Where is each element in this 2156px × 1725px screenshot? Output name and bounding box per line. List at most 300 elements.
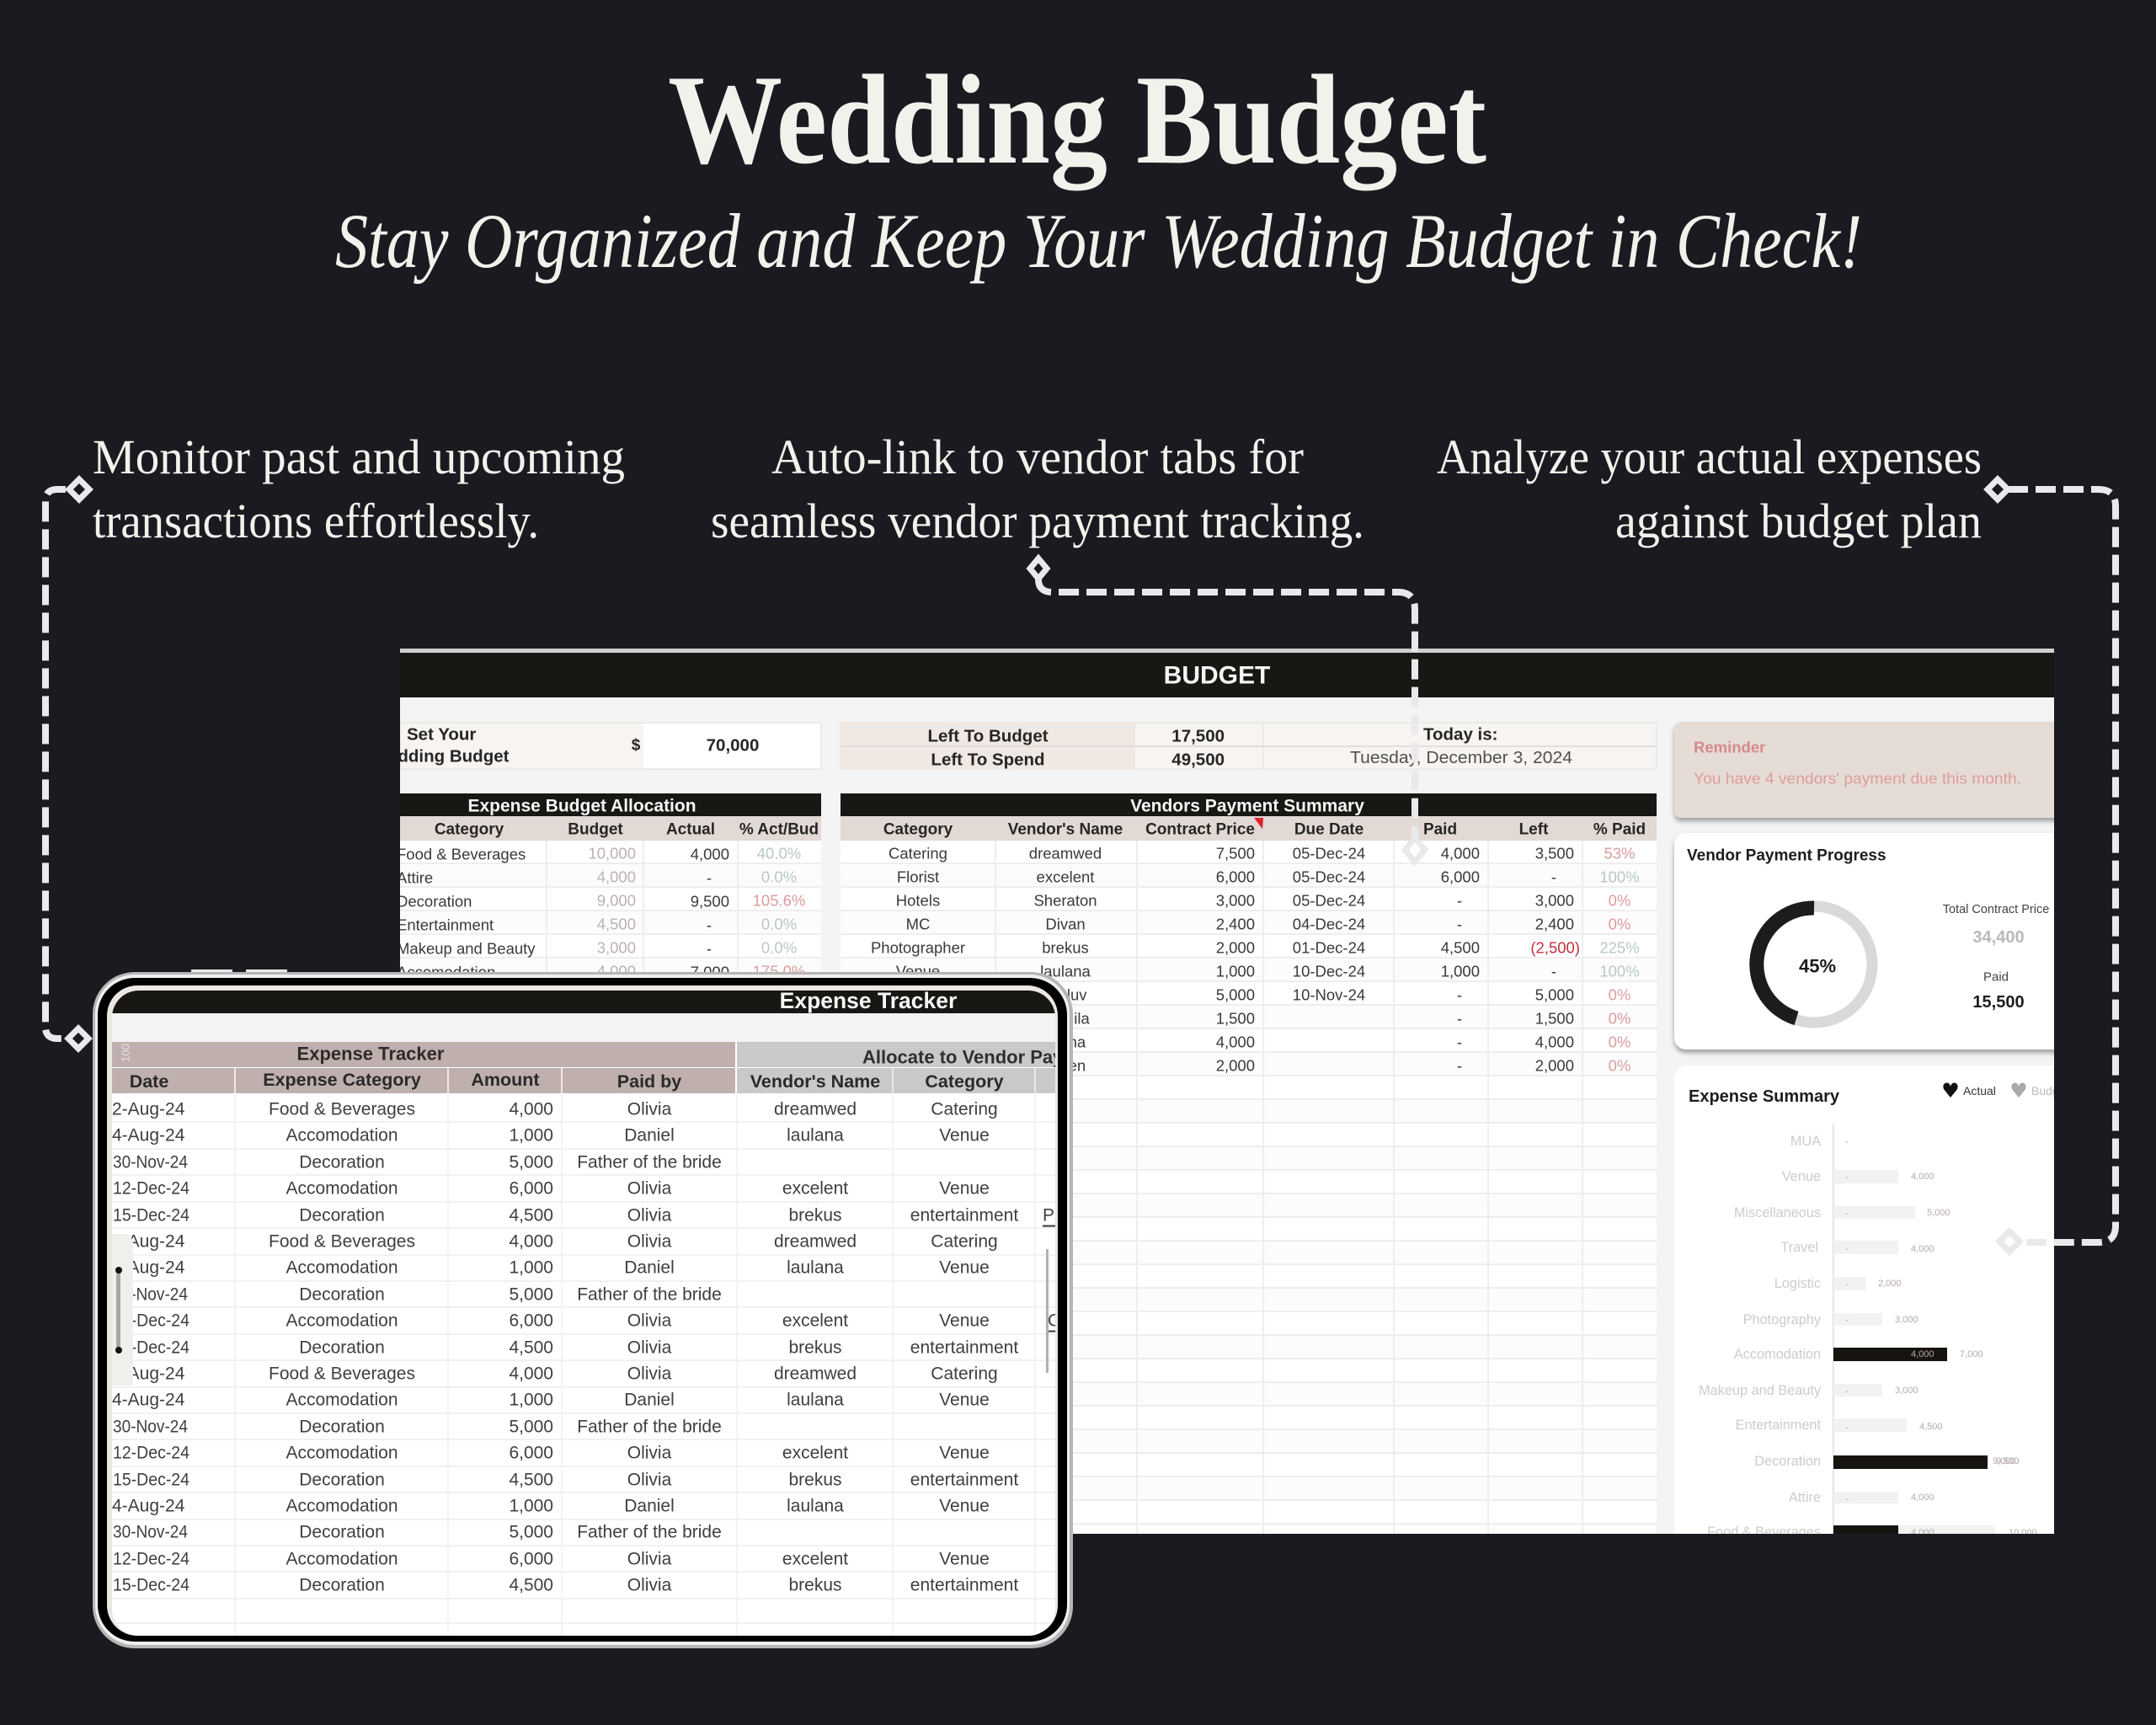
table: vendors payment summary: Category bbox=[883, 820, 953, 839]
tracker rows: 6,000 bbox=[509, 1179, 553, 1198]
caption: monitor transactions: transactions effortlessly. bbox=[93, 494, 539, 548]
table: expense budget allocation: Food & Beverages bbox=[397, 846, 526, 862]
tracker rows: 5,000 bbox=[509, 1285, 553, 1304]
tracker rows: 12-Dec-24 bbox=[113, 1179, 189, 1198]
tracker rows: excelent bbox=[782, 1311, 848, 1331]
tracker rows: Catering bbox=[931, 1231, 998, 1252]
payment figures: 15,500 bbox=[1972, 993, 2025, 1012]
column headers: Amount bbox=[471, 1070, 540, 1090]
tracker rows: Venue bbox=[939, 1125, 990, 1146]
table: vendors payment summary: Venue bbox=[896, 962, 940, 980]
table: vendors payment summary: - bbox=[1551, 868, 1556, 886]
table: vendors payment summary: Vendor's Name bbox=[1008, 820, 1123, 839]
table: vendors payment summary: 2,000 bbox=[1535, 1056, 1574, 1075]
bar chart: - bbox=[1845, 1423, 1849, 1433]
tracker rows: brekus bbox=[788, 1471, 842, 1489]
tracker rows: Decoration bbox=[299, 1152, 385, 1172]
panel: expense summary bbox=[1674, 1065, 2054, 1534]
legend: Budget bbox=[2031, 1084, 2068, 1097]
tracker rows: 4,500 bbox=[509, 1575, 553, 1595]
table: vendors payment summary: 6,000 bbox=[1441, 868, 1480, 886]
table: expense budget allocation: 9,500 bbox=[691, 893, 729, 910]
tracker rows: 4-Aug-24 bbox=[112, 1496, 185, 1516]
bar chart: 4,000 bbox=[1911, 1172, 1935, 1182]
tracker rows: 1,000 bbox=[509, 1258, 553, 1277]
bar chart: Photography bbox=[1743, 1312, 1822, 1327]
tracker rows: 1,000 bbox=[509, 1125, 553, 1146]
bar chart: Attire bbox=[1789, 1490, 1821, 1505]
tracker rows: Father of the bride bbox=[577, 1417, 722, 1437]
vendor allocation section header: Allocate to Vendor Payment bbox=[862, 1046, 1108, 1068]
expense tracker section header: 100 bbox=[120, 1044, 131, 1062]
tracker rows: 5,000 bbox=[509, 1523, 553, 1541]
bar chart: - bbox=[1845, 1209, 1849, 1219]
panel: reminder: You have 4 vendors' payment due this month. bbox=[1694, 770, 2021, 787]
tracker rows: Food & Beverages bbox=[269, 1231, 415, 1252]
column headers: Date bbox=[130, 1071, 168, 1092]
tracker rows: Decoration bbox=[299, 1206, 385, 1225]
bar chart: 9,000 bbox=[1993, 1456, 2016, 1466]
table: vendors payment summary: 0% bbox=[1609, 1033, 1630, 1051]
tracker rows: dreamwed bbox=[774, 1100, 857, 1119]
table: vendors payment summary: excelent bbox=[1037, 868, 1094, 886]
bar chart: - bbox=[1845, 1316, 1849, 1326]
table: vendors payment summary: 2,000 bbox=[1216, 938, 1255, 957]
tracker rows: Accomodation bbox=[286, 1550, 398, 1568]
bar chart: 5,000 bbox=[1927, 1208, 1951, 1218]
table: expense budget allocation: 7,000 bbox=[691, 964, 729, 980]
table: vendors payment summary: Weluv bbox=[1043, 985, 1087, 1004]
bar chart: 3,000 bbox=[1895, 1315, 1919, 1325]
column headers: Category bbox=[925, 1071, 1004, 1092]
tracker rows: Venue bbox=[939, 1311, 990, 1331]
payment figures: Paid bbox=[1983, 970, 2009, 984]
tracker rows: excelent bbox=[782, 1444, 848, 1462]
table: vendors payment summary: 10-Nov-24 bbox=[1293, 985, 1365, 1004]
today date box: Today is: bbox=[1423, 724, 1497, 745]
tracker rows: Olivia bbox=[627, 1444, 672, 1462]
table: expense budget allocation: 105.6% bbox=[753, 891, 805, 910]
table: vendors payment summary: dreamwed bbox=[1029, 844, 1102, 862]
tracker rows: 4,000 bbox=[509, 1231, 553, 1252]
table: vendors payment summary: 4,500 bbox=[1441, 938, 1480, 957]
tracker rows: Olivia bbox=[627, 1365, 672, 1383]
set your wedding budget box bbox=[372, 723, 821, 769]
table: vendors payment summary: 0% bbox=[1609, 1056, 1630, 1075]
table: vendors payment summary: Divan bbox=[1045, 915, 1086, 933]
table: vendors payment summary: Sheraton bbox=[1033, 891, 1097, 910]
table: expense budget allocation: Budget bbox=[568, 820, 623, 839]
panel: reminder: Reminder bbox=[1694, 738, 1765, 756]
table: vendors payment summary: 05-Dec-24 bbox=[1293, 868, 1365, 886]
tracker rows: excelent bbox=[782, 1179, 848, 1198]
table: vendors payment summary: 3,500 bbox=[1535, 844, 1574, 862]
panel: expense summary: Expense Summary bbox=[1689, 1087, 1840, 1106]
table: vendors payment summary: - bbox=[1551, 962, 1556, 980]
tracker rows: Accomodation bbox=[286, 1390, 398, 1410]
bar chart: 4,500 bbox=[1919, 1422, 1943, 1432]
tracker rows: Daniel bbox=[624, 1258, 675, 1277]
sheet header bar bbox=[400, 653, 2054, 697]
table: expense budget allocation: - bbox=[707, 869, 712, 886]
table: vendors payment summary: 2,000 bbox=[1216, 1056, 1255, 1075]
tracker rows: 15-Dec-24 bbox=[113, 1575, 189, 1595]
tracker rows: Catering bbox=[931, 1365, 998, 1383]
payment figures bbox=[1943, 903, 2049, 1012]
caption: auto-link vendor tabs: Auto-link to vendor tabs for bbox=[771, 430, 1304, 484]
bar chart: 4,000 bbox=[1911, 1493, 1935, 1503]
tracker rows: Accomodation bbox=[286, 1496, 398, 1516]
table: vendors payment summary: 3,000 bbox=[1535, 891, 1574, 910]
tracker rows: 4,500 bbox=[509, 1471, 553, 1489]
bar chart: Makeup and Beauty bbox=[1699, 1383, 1822, 1398]
table: expense budget allocation: 4,000 bbox=[597, 868, 636, 886]
tracker rows: Accomodation bbox=[286, 1258, 398, 1277]
table: vendors payment summary: 05-Dec-24 bbox=[1293, 844, 1365, 862]
table: vendors payment summary: - bbox=[1457, 1056, 1462, 1075]
tracker rows: laulana bbox=[787, 1390, 844, 1410]
caption: monitor transactions: Monitor past and upcoming bbox=[93, 430, 625, 484]
tracker rows: 15-Dec-24 bbox=[113, 1471, 189, 1489]
expense tracker section header: Expense Tracker bbox=[297, 1043, 445, 1065]
table: vendors payment summary: 4,000 bbox=[1441, 844, 1480, 862]
table: vendors payment summary: 4,000 bbox=[1216, 1033, 1255, 1051]
caption: monitor transactions bbox=[93, 430, 625, 548]
table: vendors payment summary: 1,000 bbox=[1441, 962, 1480, 980]
table: vendors payment summary: % Paid bbox=[1593, 820, 1646, 839]
tracker rows: 12-Dec-24 bbox=[113, 1444, 189, 1462]
bar chart: 2,000 bbox=[1878, 1279, 1902, 1289]
tracker rows: 30-Nov-24 bbox=[113, 1285, 188, 1304]
bar chart: Food & Beverages bbox=[1707, 1525, 1821, 1540]
bar chart: - bbox=[1845, 1137, 1849, 1147]
table: vendors payment summary: 5,000 bbox=[1535, 985, 1574, 1004]
table: expense budget allocation: 10,000 bbox=[588, 844, 636, 862]
table: vendors payment summary: Catering bbox=[889, 844, 947, 862]
table: expense budget allocation: % Act/Bud bbox=[739, 820, 819, 839]
tracker rows: laulana bbox=[787, 1258, 844, 1277]
table: vendors payment summary: 6,000 bbox=[1216, 868, 1255, 886]
table: vendors payment summary: 53% bbox=[1604, 844, 1636, 862]
table: vendors payment summary: 2,400 bbox=[1535, 915, 1574, 933]
table: expense budget allocation: 4,500 bbox=[597, 915, 636, 933]
bar chart: Venue bbox=[1782, 1169, 1821, 1184]
tracker rows: 30-Nov-24 bbox=[113, 1417, 188, 1437]
tracker rows: Olivia bbox=[627, 1338, 672, 1358]
table: expense budget allocation: 3,000 bbox=[597, 938, 636, 957]
tracker rows: entertainment bbox=[910, 1338, 1018, 1358]
bar chart: MUA bbox=[1790, 1134, 1821, 1149]
caption: analyze expenses bbox=[1437, 430, 1982, 548]
tracker rows: 2-Aug-24 bbox=[112, 1365, 185, 1383]
sheet header bar: BUDGET bbox=[1164, 662, 1270, 689]
tracker rows: 5,000 bbox=[509, 1417, 553, 1437]
table: expense budget allocation: 0.0% bbox=[761, 938, 797, 957]
tracker rows: dreamwed bbox=[774, 1231, 857, 1252]
table: vendors payment summary: 7,500 bbox=[1216, 844, 1255, 862]
tracker rows: 15-Dec-24 bbox=[113, 1338, 189, 1358]
caption: analyze expenses: against budget plan bbox=[1615, 494, 1982, 548]
bar chart: 3,000 bbox=[1895, 1386, 1919, 1396]
tracker rows: 5,000 bbox=[509, 1152, 553, 1172]
panel: vendor payment progress bbox=[1674, 833, 2070, 1049]
table: expense budget allocation: Accomodation bbox=[397, 964, 495, 980]
tracker rows: Olivia bbox=[627, 1550, 672, 1568]
panel: vendor payment progress: Vendor Payment Progress bbox=[1687, 847, 1886, 864]
table: vendors payment summary: 0% bbox=[1609, 891, 1630, 910]
table: vendors payment summary: - bbox=[1457, 1033, 1462, 1051]
table: vendors payment summary: 100% bbox=[1599, 962, 1640, 980]
table: expense budget allocation: Entertainment bbox=[397, 916, 494, 933]
set your wedding budget box: Wedding Budget bbox=[372, 746, 510, 766]
table: expense budget allocation: - bbox=[707, 940, 712, 957]
left to budget box: 17,500 bbox=[1171, 726, 1225, 746]
table: vendors payment summary: (2,500) bbox=[1530, 938, 1580, 957]
bar chart: Accomodation bbox=[1734, 1347, 1821, 1362]
table: vendors payment summary: Left bbox=[1519, 820, 1549, 839]
tracker rows: 4,500 bbox=[509, 1206, 553, 1225]
tracker rows: 4-Aug-24 bbox=[112, 1258, 185, 1277]
tracker rows: Decoration bbox=[299, 1417, 385, 1437]
tracker rows: Decoration bbox=[299, 1523, 385, 1541]
bar chart: Travel bbox=[1780, 1240, 1818, 1255]
set your wedding budget box: $ bbox=[632, 736, 641, 755]
bar chart: - bbox=[1845, 1386, 1849, 1397]
tracker rows: Olivia bbox=[627, 1206, 672, 1225]
table: vendors payment summary: - bbox=[1457, 985, 1462, 1004]
legend: ♥ bbox=[1941, 1079, 1960, 1103]
table: vendors payment summary: Helen bbox=[1045, 1056, 1086, 1075]
table: expense budget allocation: 40.0% bbox=[757, 844, 801, 862]
table: vendors payment summary: 04-Dec-24 bbox=[1293, 915, 1365, 933]
tracker rows: dreamwed bbox=[774, 1365, 857, 1383]
table: vendors payment summary: - bbox=[1457, 1009, 1462, 1028]
table: vendors payment summary: Contract Price bbox=[1145, 820, 1255, 839]
tracker rows: Venue bbox=[939, 1496, 990, 1516]
tracker rows: Father of the bride bbox=[577, 1152, 722, 1172]
table: vendors payment summary: 1,000 bbox=[1216, 962, 1255, 980]
caption: analyze expenses: Analyze your actual expenses bbox=[1437, 430, 1982, 484]
title: Wedding Budget bbox=[668, 49, 1486, 191]
tracker rows: 1,000 bbox=[509, 1496, 553, 1516]
tracker rows: Decoration bbox=[299, 1285, 385, 1304]
bar chart: Miscellaneous bbox=[1734, 1205, 1821, 1220]
arrow: middle connector to vendor table bbox=[1030, 558, 1425, 862]
panel: tablet with expense tracker bbox=[93, 969, 1108, 1648]
tracker rows: Accomodation bbox=[286, 1444, 398, 1462]
table: expense budget allocation: Makeup and Beauty bbox=[397, 940, 536, 957]
today date box bbox=[1263, 723, 1657, 769]
tracker rows: Catering bbox=[931, 1100, 998, 1119]
tracker rows: Father of the bride bbox=[577, 1523, 722, 1541]
arrow: right connector to expense summary bbox=[1988, 479, 2116, 1252]
table: vendors payment summary: 1,500 bbox=[1535, 1009, 1574, 1028]
table: vendors payment summary: 1,500 bbox=[1216, 1009, 1255, 1028]
payment figures: 34,400 bbox=[1972, 928, 2025, 947]
set your wedding budget box: 70,000 bbox=[707, 736, 759, 755]
bar chart: 4,000 bbox=[1911, 1528, 1935, 1538]
table: vendors payment summary: Camila bbox=[1041, 1009, 1090, 1028]
table: expense budget allocation: Actual bbox=[666, 820, 715, 839]
table: vendors payment summary: 3,000 bbox=[1216, 891, 1255, 910]
tracker rows: laulana bbox=[787, 1496, 844, 1516]
tracker rows: 2-Aug-24 bbox=[112, 1100, 185, 1119]
bar chart: Entertainment bbox=[1736, 1418, 1821, 1433]
tracker rows: 4,000 bbox=[509, 1365, 553, 1383]
tracker rows: Olivia bbox=[627, 1100, 672, 1119]
legend bbox=[1943, 1083, 2054, 1097]
table: vendors payment summary: Vendors Payment Summary bbox=[1130, 797, 1364, 815]
tracker rows: Olivia bbox=[627, 1231, 672, 1252]
legend: Actual bbox=[1963, 1084, 1996, 1097]
tracker rows: 4-Aug-24 bbox=[112, 1125, 185, 1146]
table: vendors payment summary: 0% bbox=[1609, 1009, 1630, 1028]
table: vendors payment summary: Due Date bbox=[1294, 820, 1364, 839]
tablet frame bbox=[93, 972, 1073, 1648]
table: expense budget allocation: Expense Budget Allocation bbox=[467, 797, 696, 815]
tracker rows: Daniel bbox=[624, 1390, 675, 1410]
tablet screen bbox=[112, 988, 1108, 1636]
donut chart 45%: 45% bbox=[1799, 955, 1836, 977]
tracker rows: Accomodation bbox=[286, 1311, 398, 1331]
tracker rows: 4-Aug-24 bbox=[112, 1390, 185, 1410]
tracker rows: Decoration bbox=[299, 1471, 385, 1489]
bar chart: 9,500 bbox=[1996, 1456, 2020, 1466]
today date box: Tuesday, December 3, 2024 bbox=[1350, 749, 1572, 767]
table: expense budget allocation: 0.0% bbox=[761, 915, 797, 933]
tracker rows: 4,000 bbox=[509, 1100, 553, 1119]
tracker rows: Cl bbox=[1048, 1311, 1065, 1331]
table: expense budget allocation bbox=[397, 793, 821, 980]
bar chart bbox=[1699, 1124, 2037, 1540]
bar chart: Logistic bbox=[1774, 1276, 1821, 1291]
tracker rows: Accomodation bbox=[286, 1125, 398, 1146]
table: vendors payment summary: 225% bbox=[1599, 938, 1640, 957]
table: expense budget allocation: Decoration bbox=[397, 893, 472, 910]
table: vendors payment summary: 100% bbox=[1599, 868, 1640, 886]
tracker rows: excelent bbox=[782, 1550, 848, 1568]
tracker rows: Decoration bbox=[299, 1575, 385, 1595]
left to budget box: Left To Budget bbox=[927, 726, 1049, 746]
set your wedding budget box: Set Your bbox=[407, 724, 476, 745]
tracker rows: Accomodation bbox=[286, 1179, 398, 1198]
bar chart: 7,000 bbox=[1960, 1349, 1983, 1359]
payment figures: Total Contract Price bbox=[1943, 903, 2049, 916]
tracker rows: Decoration bbox=[299, 1338, 385, 1358]
table: expense budget allocation: 0.0% bbox=[761, 868, 797, 886]
column headers: Expense Category bbox=[263, 1070, 421, 1090]
tracker rows: Venue bbox=[939, 1550, 990, 1568]
tracker rows: 30-Nov-24 bbox=[113, 1523, 188, 1541]
table: vendors payment summary: laulana bbox=[1040, 962, 1091, 980]
table: vendors payment summary: 2,400 bbox=[1216, 915, 1255, 933]
table: expense budget allocation: 9,000 bbox=[597, 891, 636, 910]
table: expense budget allocation: Attire bbox=[397, 869, 433, 886]
left side scroll control bbox=[112, 1234, 133, 1386]
tracker rows: brekus bbox=[788, 1338, 842, 1358]
bar chart: - bbox=[1845, 1494, 1849, 1504]
tracker title bar: Expense Tracker bbox=[780, 988, 957, 1013]
tracker rows: 1,000 bbox=[509, 1390, 553, 1410]
table: vendors payment summary: Hotels bbox=[896, 891, 940, 910]
panel: reminder bbox=[1674, 722, 2070, 818]
tracker rows: 6,000 bbox=[509, 1550, 553, 1568]
table: vendors payment summary: 10-Dec-24 bbox=[1293, 962, 1365, 980]
table: vendors payment summary: MC bbox=[906, 915, 930, 933]
panel: budget spreadsheet bbox=[372, 649, 2070, 1571]
table: expense budget allocation: 4,000 bbox=[597, 962, 636, 980]
tracker rows: Father of the bride bbox=[577, 1285, 722, 1304]
table: vendors payment summary: - bbox=[1457, 915, 1462, 933]
tracker rows: 30-Nov-24 bbox=[113, 1152, 188, 1172]
expense tracker section header bbox=[112, 1042, 735, 1067]
tracker rows: Olivia bbox=[627, 1575, 672, 1595]
tracker rows: 12-Dec-24 bbox=[113, 1311, 189, 1331]
table: vendors payment summary: 05-Dec-24 bbox=[1293, 891, 1365, 910]
tracker rows: 12-Dec-24 bbox=[113, 1550, 189, 1568]
table: expense budget allocation: Category bbox=[435, 820, 504, 839]
tracker rows: Venue bbox=[939, 1444, 990, 1462]
bar chart: - bbox=[1845, 1244, 1849, 1254]
tracker rows: Venue bbox=[939, 1179, 990, 1198]
tracker rows: Venue bbox=[939, 1258, 990, 1277]
bar chart: 4,000 bbox=[1911, 1349, 1935, 1359]
caption: auto-link vendor tabs bbox=[711, 430, 1364, 548]
tracker rows: Olivia bbox=[627, 1471, 672, 1489]
tracker rows: entertainment bbox=[910, 1206, 1018, 1225]
bar chart: 10,000 bbox=[2009, 1528, 2037, 1538]
table: expense budget allocation: - bbox=[707, 916, 712, 933]
bar chart: 4,000 bbox=[1911, 1244, 1935, 1254]
tracker rows: Daniel bbox=[624, 1125, 675, 1146]
tracker rows: Daniel bbox=[624, 1496, 675, 1516]
tracker rows: 6,000 bbox=[509, 1311, 553, 1331]
table: vendors payment summary: 0% bbox=[1609, 985, 1630, 1004]
column headers: Vendor's Name bbox=[750, 1071, 880, 1092]
bar chart: - bbox=[1845, 1279, 1849, 1290]
table: vendors payment summary: 5,000 bbox=[1216, 985, 1255, 1004]
left to budget box: 49,500 bbox=[1171, 750, 1225, 770]
tracker title bar bbox=[112, 988, 1055, 1013]
table: vendors payment summary: Paid bbox=[1423, 820, 1457, 839]
arrow: left connector to tablet bbox=[45, 479, 89, 1049]
table: vendors payment summary: 4,000 bbox=[1535, 1033, 1574, 1051]
legend: ♥ bbox=[2009, 1079, 2028, 1103]
tracker rows: Food & Beverages bbox=[269, 1100, 415, 1119]
tracker rows bbox=[112, 1093, 1074, 1636]
column headers bbox=[112, 1068, 1055, 1093]
tracker rows: Olivia bbox=[627, 1311, 672, 1331]
donut chart 45% bbox=[1756, 906, 1872, 1023]
left to budget box bbox=[841, 723, 1263, 770]
tracker rows: Pay bbox=[1043, 1206, 1074, 1225]
column headers: Paid by bbox=[617, 1071, 681, 1092]
table: expense budget allocation: 4,000 bbox=[691, 846, 729, 862]
tracker rows: Olivia bbox=[627, 1179, 672, 1198]
table: vendors payment summary: - bbox=[1457, 891, 1462, 910]
tracker rows: entertainment bbox=[910, 1471, 1018, 1489]
table: expense budget allocation: 175.0% bbox=[753, 962, 805, 980]
tracker rows: Venue bbox=[939, 1390, 990, 1410]
subtitle: Stay Organized and Keep Your Wedding Budget in Check! bbox=[335, 198, 1862, 284]
tracker rows: 15-Dec-24 bbox=[113, 1206, 189, 1225]
tracker rows: 4,500 bbox=[509, 1338, 553, 1358]
tracker rows: laulana bbox=[787, 1125, 844, 1146]
table: vendors payment summary: 0% bbox=[1609, 915, 1630, 933]
tracker rows: brekus bbox=[788, 1206, 842, 1225]
table: vendors payment summary: brekus bbox=[1042, 938, 1089, 957]
right scrollbar bbox=[1046, 1249, 1049, 1373]
